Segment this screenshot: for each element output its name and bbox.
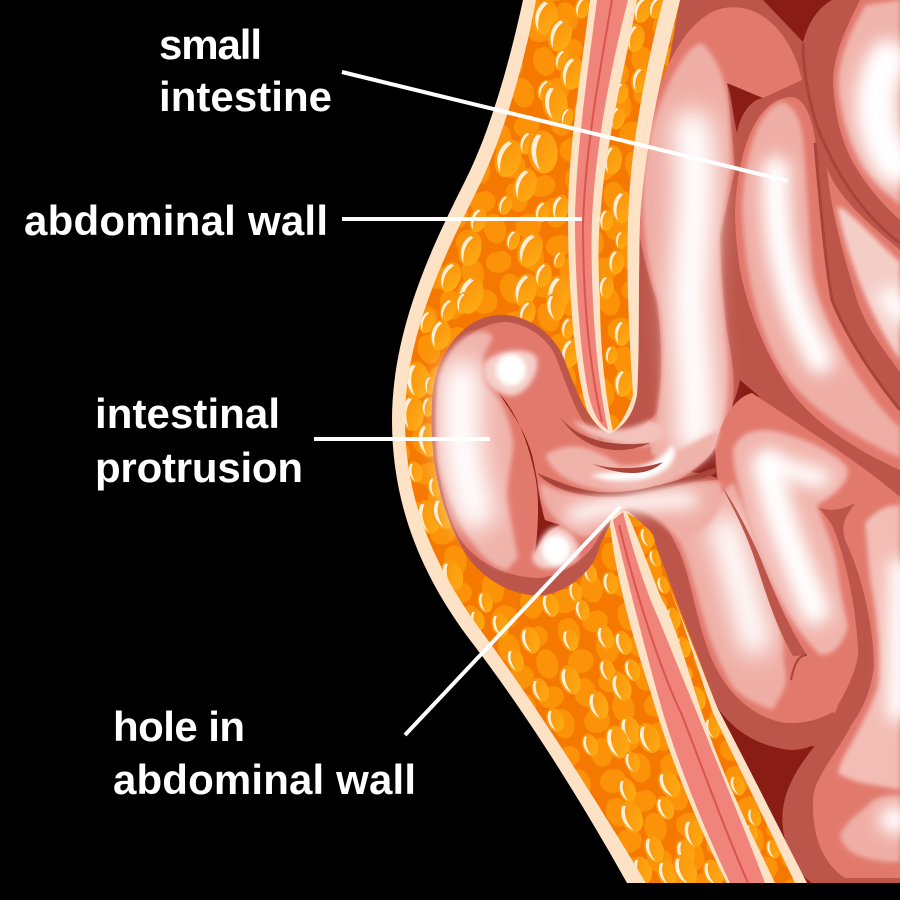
callout line: small intestine — [342, 72, 788, 181]
label: hole in abdominal wall: hole in — [113, 703, 245, 750]
label: small intestine — [159, 21, 332, 120]
middle bend highlight — [733, 430, 848, 655]
body outline skin layer — [392, 0, 646, 883]
highlight of sac — [437, 332, 518, 570]
label: intestinal protrusion — [95, 390, 303, 491]
label: intestinal protrusion: protrusion — [95, 444, 303, 491]
right column highlight — [838, 505, 900, 790]
small intestine lower loops — [663, 393, 900, 878]
loop: diagonal second — [735, 97, 900, 470]
label: hole in abdominal wall: abdominal wall — [113, 756, 416, 803]
upper fat strip — [598, 0, 663, 431]
callout line: hole in abdominal wall — [405, 507, 620, 735]
upper muscle — [575, 0, 628, 430]
intestine neck folds — [537, 417, 720, 497]
lower strip globules — [636, 524, 783, 861]
upper strip globules — [597, 0, 666, 398]
fat globules — [400, 0, 727, 890]
loop: top right — [803, 0, 900, 410]
label: small intestine: small — [159, 21, 262, 68]
loop: third right diagonal — [827, 167, 900, 372]
callout line: abdominal wall — [342, 217, 582, 221]
upper white nub — [483, 351, 537, 396]
dark cavity gaps — [690, 0, 832, 883]
fold lines — [718, 480, 807, 656]
abdominal wall upper section — [568, 0, 680, 434]
lower white nub — [532, 527, 579, 569]
small intestine upper loops — [640, 0, 900, 486]
label: small intestine: intestine — [159, 73, 332, 120]
lower mid tone mass — [663, 393, 900, 878]
sac inner — [436, 322, 650, 578]
fold band between loops — [811, 503, 874, 746]
intestine band across hole — [540, 481, 722, 540]
abdominal wall lower section — [610, 511, 807, 883]
herniated intestine protrusion sac — [432, 315, 722, 595]
fold slit in sac — [498, 392, 560, 552]
Y fold tips — [791, 655, 807, 680]
callout line: intestinal protrusion — [314, 437, 490, 441]
label: intestinal protrusion: intestinal — [95, 390, 280, 437]
lower muscle — [613, 512, 765, 883]
label: hole in abdominal wall — [113, 703, 416, 803]
subcutaneous fat layer — [405, 0, 727, 883]
loop: left vertical — [640, 7, 802, 486]
lower left lobe highlight — [670, 482, 786, 710]
intestine base — [610, 0, 900, 883]
lower fat strip — [627, 513, 795, 883]
label: abdominal wall: abdominal wall — [24, 197, 328, 244]
bottom right loop — [840, 795, 900, 862]
